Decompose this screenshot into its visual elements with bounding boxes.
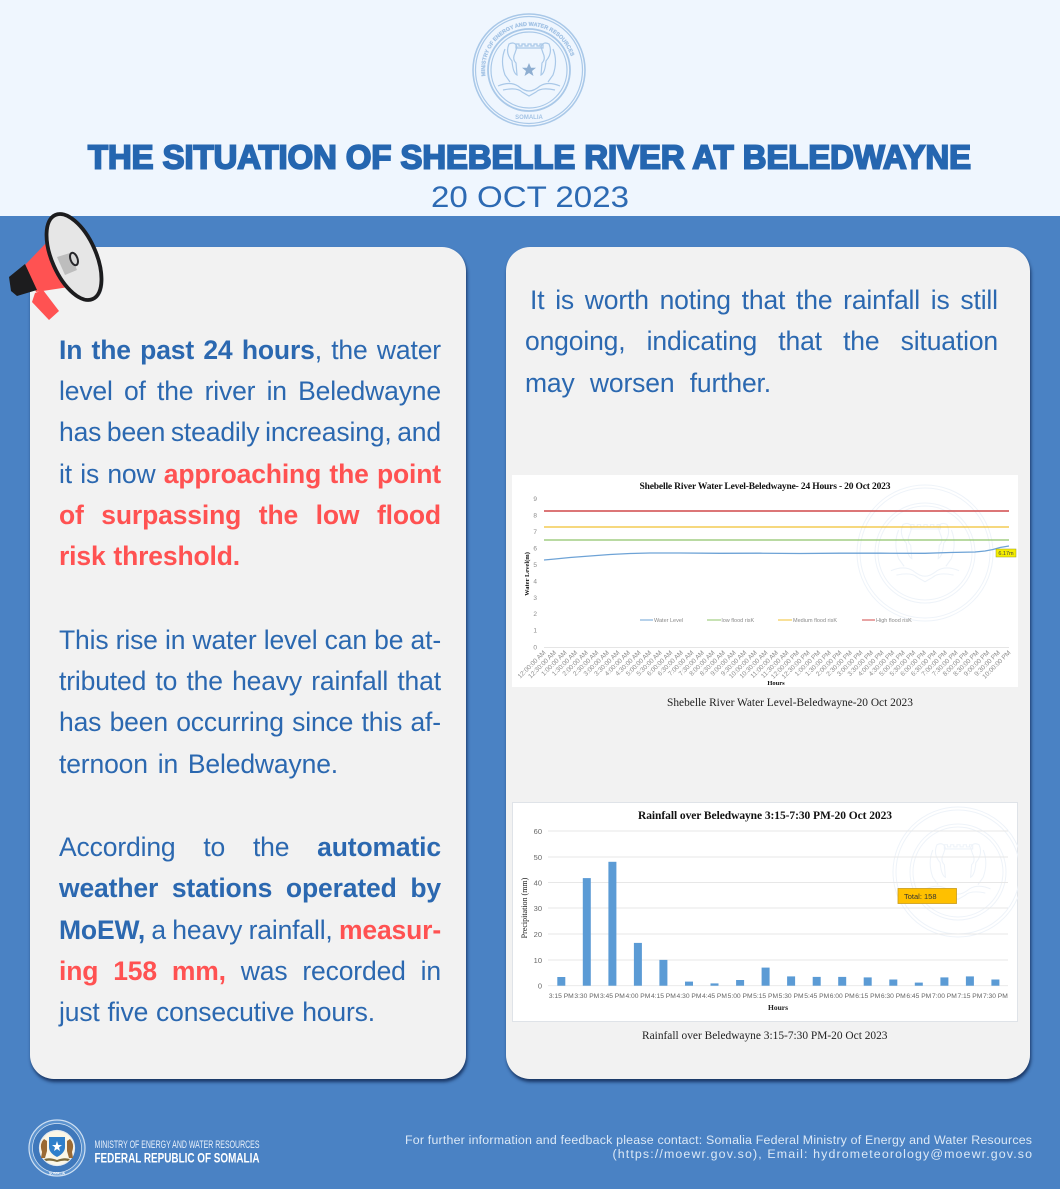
x axis labels: 4:00:00 PM (857, 649, 886, 678)
x axis labels: 5:30:00 AM (635, 649, 664, 678)
x axis labels: 1:00:00 AM (540, 649, 569, 678)
x axis labels: 7:30:00 PM (931, 649, 960, 678)
value tag: 6.17m (998, 551, 1014, 557)
y axis labels: 0 (538, 982, 542, 990)
x axis labels: 10:30:00 AM (739, 649, 769, 680)
x axis labels: 6:30:00 AM (657, 649, 685, 678)
x axis labels: 10:00:00 PM (981, 649, 1012, 680)
low flood risk line (544, 539, 1009, 541)
footer logo (28, 1119, 86, 1177)
legend: low flood risK (722, 618, 755, 624)
paragraph: automatic weather stations: heavy (172, 915, 242, 945)
x axis labels: 12:00:00 PM (770, 649, 801, 680)
x axis labels: 9:00:00 AM (709, 649, 738, 678)
x axis labels: 5:00 PM (728, 993, 753, 1000)
x axis labels: 5:15 PM (753, 993, 778, 1000)
x axis labels: 2:30:00 AM (572, 649, 600, 678)
chart title: Rainfall over Beledwayne 3:15-7:30 PM-20 Oct 2023 (638, 810, 892, 822)
text: rainfall note: ongoing, (525, 326, 625, 356)
paragraph: past 24 hours: 24 (203, 335, 233, 365)
x axis labels: 10:00:00 AM (728, 649, 759, 680)
x axis labels: 3:15 PM (549, 993, 574, 1000)
text: rainfall note: still (960, 285, 998, 315)
paragraph: past 24 hours: of (124, 376, 146, 406)
paragraph: past 24 hours: river (205, 376, 255, 406)
x axis labels (549, 993, 1008, 1000)
paragraph: past 24 hours: threshold. (113, 541, 240, 571)
paragraph: past 24 hours: the (259, 500, 298, 530)
paragraph: cause of rise: heavy (232, 666, 302, 696)
paragraph: cause of rise: been (110, 707, 168, 737)
footer ministry name (94, 1139, 260, 1166)
logo ribbon (44, 1158, 70, 1162)
y axis labels: 9 (533, 496, 537, 503)
x axis labels: 9:00:00 PM (963, 649, 991, 678)
caption: water level chart: Shebelle River Water Level-Beledwayne-20 Oct 2023 (667, 697, 913, 709)
paragraph: automatic weather stations: operated (286, 873, 397, 903)
paragraph: cause of rise: since (292, 707, 353, 737)
paragraph: cause of rise: af- (410, 707, 441, 737)
paragraph: past 24 hours: been (107, 417, 165, 447)
y axis labels: 20 (534, 930, 542, 939)
paragraph: past 24 hours: in (267, 376, 287, 406)
paragraph: past 24 hours: the (92, 335, 131, 365)
x axis labels: 11:30:00 AM (760, 649, 790, 680)
logo shield (49, 1137, 65, 1157)
total callout: Total: 158 (904, 892, 937, 901)
x axis labels: 4:00 PM (625, 993, 651, 1000)
y axis labels (534, 827, 542, 990)
text: rainfall note: is (931, 285, 950, 315)
x axis labels: 12:30:00 PM (781, 649, 812, 680)
x axis title: Hours (767, 680, 785, 687)
paragraph: automatic weather stations: ing (59, 956, 98, 986)
paragraph: automatic weather stations: in (421, 956, 441, 986)
y axis title: Water Level(m) (524, 552, 531, 596)
paragraph: automatic weather stations: just (59, 997, 100, 1027)
paragraph: cause of rise: has (59, 707, 101, 737)
y axis labels: 10 (534, 956, 542, 965)
y axis labels: 7 (533, 529, 537, 536)
chart watermark (857, 485, 993, 621)
paragraph: past 24 hours: past (140, 335, 194, 365)
x axis labels: 8:00:00 PM (942, 649, 970, 678)
x axis labels: 11:00:00 AM (749, 649, 780, 680)
high flood risk line (544, 510, 1009, 512)
chart title: Shebelle River Water Level-Beledwayne- 24 Hours - 20 Oct 2023 (640, 482, 891, 492)
x axis labels: 7:30 PM (983, 993, 1008, 1000)
date: 20 OCT 2023 (431, 181, 629, 214)
legend (640, 618, 912, 624)
x axis labels: 4:15 PM (651, 993, 676, 1000)
chart watermark (893, 807, 1023, 937)
x axis labels: 9:30:00 AM (720, 649, 748, 678)
paragraph: cause of rise: This (59, 625, 108, 655)
x axis labels: 3:00:00 PM (836, 649, 864, 678)
x axis labels: 4:00:00 AM (604, 649, 632, 678)
x axis labels: 5:30 PM (779, 993, 804, 1000)
x axis labels: 7:30:00 AM (678, 649, 706, 678)
caption: rainfall chart: Rainfall over Beledwayne 3:15-7:30 PM-20 Oct 2023 (642, 1030, 887, 1042)
paragraph: past 24 hours: approaching (164, 459, 321, 489)
paragraph: past 24 hours: water (377, 335, 441, 365)
paragraph: cause of rise: in (165, 625, 185, 655)
legend: Medium flood risK (793, 618, 837, 624)
x axis labels: 7:00:00 PM (920, 649, 949, 678)
text: rainfall note: indicating (647, 326, 757, 356)
paragraph: automatic weather stations: the (253, 832, 289, 862)
paragraph: automatic weather stations: to (203, 832, 225, 862)
paragraph: automatic weather stations: automatic (317, 832, 441, 862)
legend: High flood risK (876, 618, 912, 624)
paragraph: past 24 hours: flood (377, 500, 441, 530)
panel: left text (30, 247, 466, 1079)
text: rainfall note: noting (660, 285, 731, 315)
legend: Water Level (654, 618, 683, 624)
paragraph: automatic weather stations: mm, (172, 956, 226, 986)
x axis labels: 6:30:00 PM (910, 649, 938, 678)
paragraph: cause of rise: to (155, 666, 177, 696)
y axis labels: 0 (533, 644, 537, 652)
paragraph: past 24 hours: In (59, 335, 82, 365)
x axis labels: 3:30:00 AM (593, 649, 621, 678)
x axis labels: 4:30:00 PM (868, 649, 896, 678)
paragraph: automatic weather stations: hours. (302, 997, 375, 1027)
x axis labels: 6:15 PM (855, 993, 881, 1000)
paragraph: cause of rise: can (325, 625, 367, 655)
y axis labels: 4 (533, 578, 537, 586)
paragraph: past 24 hours (59, 335, 441, 571)
y axis labels: 40 (534, 878, 542, 888)
paragraph: past 24 hours: point (377, 459, 441, 489)
paragraph: automatic weather stations: 158 (113, 956, 157, 986)
footer contact text (405, 1133, 1032, 1161)
x axis title: Hours (768, 1003, 788, 1012)
paragraph: cause of rise: at- (411, 625, 441, 655)
chart: rainfall bar chart (512, 802, 1018, 1022)
x axis labels: 9:30:00 PM (973, 649, 1002, 678)
paragraph: cause of rise: water (192, 625, 257, 655)
x axis labels: 5:00:00 AM (625, 649, 653, 678)
x axis labels: 3:30:00 PM (847, 649, 875, 678)
paragraph: automatic weather stations: a (151, 915, 166, 945)
x axis labels: 2:00:00 AM (562, 649, 590, 678)
paragraph: past 24 hours: and (397, 417, 441, 447)
x axis labels: 1:30:00 AM (551, 649, 579, 678)
text: rainfall note: may (525, 368, 575, 398)
title: THE SITUATION OF SHEBELLE RIVER AT BELEDWAYNE (88, 138, 971, 176)
paragraph: automatic weather stations (58, 832, 441, 1027)
paragraph: past 24 hours: surpassing (101, 500, 241, 530)
x axis labels (517, 649, 1012, 680)
logo lions (41, 1139, 73, 1158)
paragraph: cause of rise: in (158, 749, 178, 779)
paragraph: automatic weather stations: consecutive (156, 997, 294, 1027)
paragraph: past 24 hours: of (59, 500, 84, 530)
chart: water level line chart (512, 475, 1018, 687)
text: rainfall note: It (530, 285, 544, 315)
value tag (996, 549, 1016, 557)
x axis labels: 6:30 PM (881, 993, 906, 1000)
x axis labels: 1:30:00 PM (804, 649, 833, 678)
paragraph: past 24 hours: it (59, 459, 72, 489)
seal star (522, 63, 536, 76)
paragraph: cause of rise: level (264, 625, 317, 655)
text: rainfall note: that (742, 285, 785, 315)
x axis labels: 4:30:00 AM (614, 649, 643, 678)
paragraph: automatic weather stations: by (410, 873, 441, 903)
panel: right chart panel (506, 247, 1030, 1079)
x axis labels: 2:30:00 PM (825, 649, 854, 678)
x axis labels: 5:00:00 PM (878, 649, 907, 678)
paragraph: automatic weather stations: rainfall, (249, 915, 333, 945)
paragraph: automatic weather stations: five (108, 997, 148, 1027)
x axis labels: 4:45 PM (702, 993, 727, 1000)
header band (0, 0, 1060, 216)
x axis labels: 6:00 PM (830, 993, 855, 1000)
x axis labels: 1:00:00 PM (794, 649, 822, 678)
y axis labels: 2 (533, 611, 537, 618)
paragraph: cause of rise: that (397, 666, 441, 696)
y axis labels: 60 (534, 827, 542, 836)
ministry seal: SOMALIA (515, 115, 543, 121)
text: rainfall note: rainfall (843, 285, 920, 315)
x axis labels: 12:00:00 AM (517, 649, 547, 680)
text: rainfall note: is (555, 285, 574, 315)
x axis labels: 5:30:00 PM (889, 649, 917, 678)
y axis labels: 8 (533, 512, 537, 520)
paragraph: cause of rise (59, 625, 441, 779)
paragraph: cause of rise: this (362, 707, 402, 737)
text: rainfall note: worsen (590, 368, 674, 398)
ministry seal (472, 13, 586, 127)
x axis labels: 6:45 PM (906, 993, 932, 1000)
grid lines (548, 831, 1008, 986)
paragraph: automatic weather stations: According (59, 832, 176, 862)
text: rainfall note: further. (690, 368, 771, 398)
y axis labels: 30 (534, 904, 542, 913)
water level line (544, 546, 1009, 560)
paragraph: past 24 hours: now (107, 459, 156, 489)
x axis labels: 3:00:00 AM (583, 649, 611, 678)
x axis labels: 6:00:00 AM (646, 649, 674, 678)
paragraph: past 24 hours: the (157, 376, 193, 406)
x axis labels: 4:30 PM (677, 993, 702, 1000)
paragraph: cause of rise: the (186, 666, 223, 696)
footer logo: SOMALIA (49, 1171, 66, 1175)
x axis labels: 8:30:00 AM (699, 649, 727, 678)
y axis title: Precipitation (mm) (520, 877, 529, 938)
y axis labels: 3 (533, 595, 537, 602)
paragraph: automatic weather stations: recorded (302, 956, 406, 986)
paragraph: automatic weather stations: was (241, 956, 287, 986)
y axis labels: 5 (533, 562, 537, 569)
paragraph: cause of rise: Beledwayne. (188, 749, 338, 779)
x axis labels: 8:30:00 PM (952, 649, 981, 678)
total callout (898, 888, 956, 904)
x axis labels: 5:45 PM (804, 993, 830, 1000)
x axis labels: 2:00:00 PM (815, 649, 843, 678)
text: rainfall note (525, 285, 998, 398)
paragraph: past 24 hours: steadily (171, 417, 259, 447)
paragraph: cause of rise: rainfall (311, 666, 388, 696)
paragraph: past 24 hours: the (329, 459, 369, 489)
paragraph: automatic weather stations: MoEW, (59, 915, 145, 945)
y axis labels: 1 (533, 628, 537, 634)
paragraph: past 24 hours: risk (59, 541, 106, 571)
paragraph: cause of rise: be (374, 625, 403, 655)
paragraph: automatic weather stations: measur- (339, 915, 441, 945)
paragraph: past 24 hours: is (80, 459, 99, 489)
x axis labels: 6:00:00 PM (899, 649, 928, 678)
paragraph: cause of rise: ternoon (59, 749, 148, 779)
x axis labels: 3:45 PM (600, 993, 625, 1000)
bars (557, 862, 999, 986)
text: rainfall note: the (843, 326, 879, 356)
paragraph: cause of rise: tributed (59, 666, 146, 696)
ministry seal: MINISTRY OF ENERGY AND WATER RESOURCES (481, 22, 574, 76)
x axis labels: 8:00:00 AM (688, 649, 717, 678)
paragraph: past 24 hours: hours, (242, 335, 322, 365)
y axis labels: 6 (533, 546, 537, 552)
paragraph: past 24 hours: low (316, 500, 359, 530)
y axis labels (533, 496, 537, 652)
paragraph: cause of rise: occurring (176, 707, 284, 737)
x axis labels: 7:00 PM (932, 993, 957, 1000)
x axis labels: 7:15 PM (957, 993, 983, 1000)
x axis labels: 12:30:00 AM (527, 649, 558, 680)
text: rainfall note: that (778, 326, 822, 356)
paragraph: automatic weather stations: weather (59, 873, 158, 903)
icon: megaphone (9, 212, 104, 320)
footer contact text: For further information and feedback please contact: Somalia Federal Ministry of Energy and Water Resources (405, 1133, 1032, 1147)
y axis labels: 50 (534, 853, 542, 862)
paragraph: past 24 hours: Beledwayne (298, 376, 441, 406)
paragraph: cause of rise: rise (116, 625, 158, 655)
text: rainfall note: the (796, 285, 832, 315)
paragraph: past 24 hours: has (59, 417, 101, 447)
footer strip (0, 1189, 1060, 1200)
paragraph: past 24 hours: level (59, 376, 113, 406)
paragraph: past 24 hours: the (331, 335, 368, 365)
footer contact text: (https://moewr.gov.so), Email: hydrometeorology@moewr.gov.so (612, 1147, 1032, 1161)
medium flood risk line (544, 526, 1009, 528)
x axis labels: 3:30 PM (574, 993, 600, 1000)
text: rainfall note: situation (901, 326, 998, 356)
x axis labels: 7:00:00 AM (667, 649, 695, 678)
paragraph: past 24 hours: increasing, (265, 417, 392, 447)
text: rainfall note: worth (585, 285, 649, 315)
paragraph: automatic weather stations: stations (172, 873, 272, 903)
